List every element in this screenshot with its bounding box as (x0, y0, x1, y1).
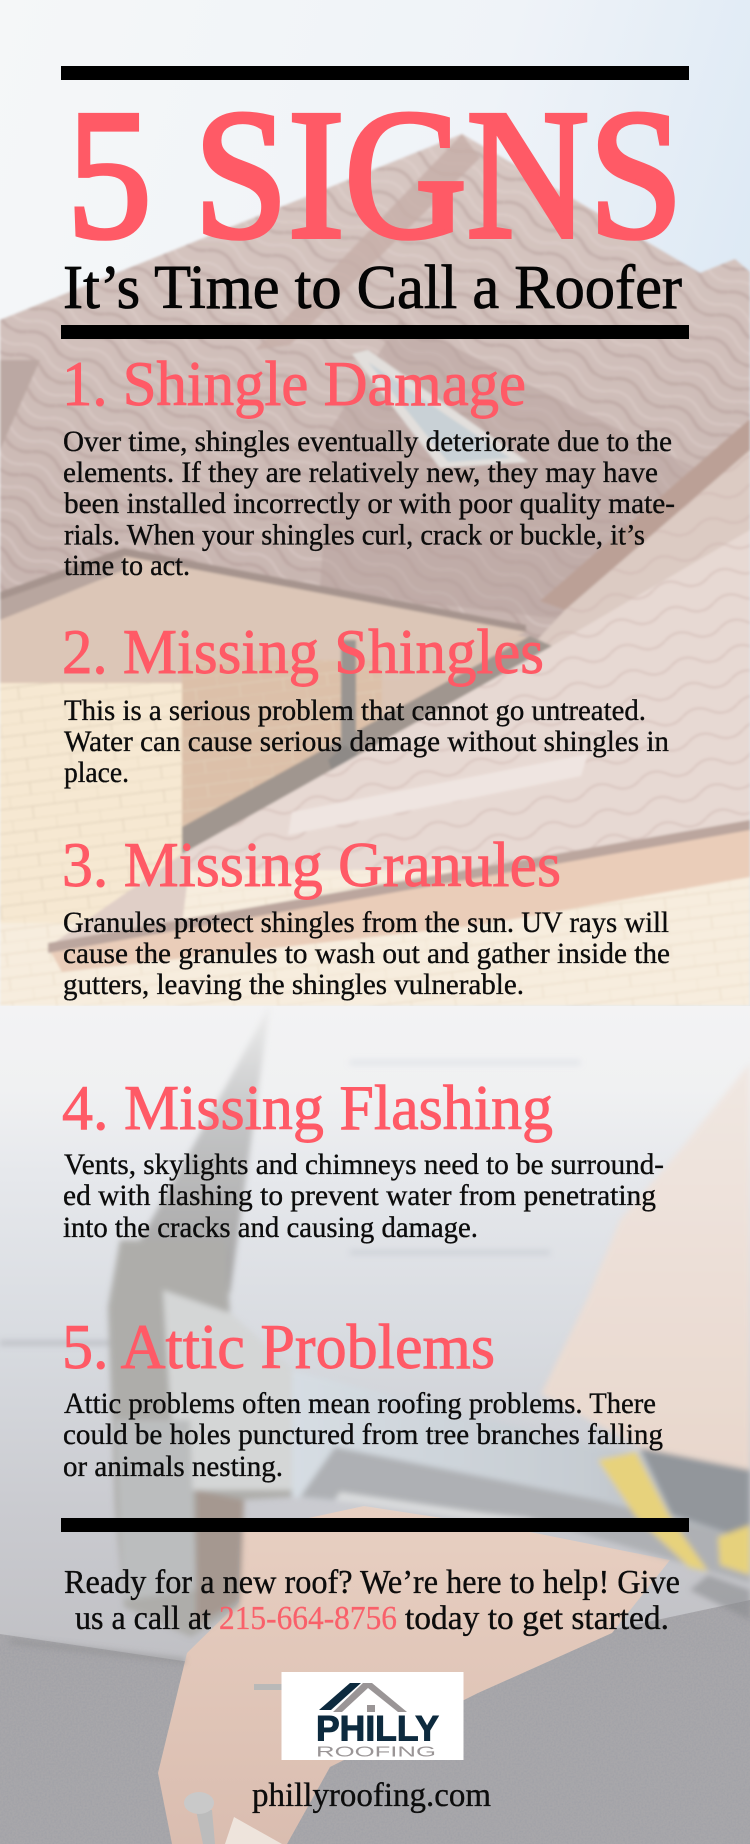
heading 4: 4. Missing Flashing (62, 1072, 553, 1143)
third rule (61, 1518, 689, 1532)
body 5: could be holes punctured from tree branches falling (63, 1418, 663, 1451)
body 5: or animals nesting. (63, 1450, 283, 1483)
body 5: Attic problems often mean roofing problems. There (64, 1387, 656, 1420)
body 4: Vents, skylights and chimneys need to be surround- (64, 1148, 664, 1181)
section 1: Shingle Damage (62, 348, 675, 582)
body 3: cause the granules to wash out and gather inside the (63, 937, 670, 970)
body 1: time to act. (64, 549, 190, 582)
background photo: hammer and hand on shingles (0, 1005, 750, 1844)
heading 1: 1. Shingle Damage (62, 348, 526, 419)
body 3: Granules protect shingles from the sun. UV rays will (63, 906, 669, 939)
heading 3: 3. Missing Granules (62, 829, 561, 900)
section 3: Missing Granules (62, 829, 670, 1001)
body 5 (63, 1387, 663, 1483)
body 3: gutters, leaving the shingles vulnerable. (63, 968, 524, 1001)
body 2: place. (64, 756, 129, 789)
body 1: rials. When your shingles curl, crack or buckle, it’s (64, 518, 645, 552)
call to action: Ready for a new roof? We’re here to help! Give (64, 1564, 680, 1601)
logo: Philly Roofing (282, 1672, 464, 1760)
section 4: Missing Flashing (62, 1072, 664, 1244)
subtitle: It’s Time to Call a Roofer (63, 254, 682, 322)
body 1: Over time, shingles eventually deteriorate due to the (63, 425, 672, 458)
body 4: into the cracks and causing damage. (63, 1211, 478, 1244)
website: phillyroofing.com (252, 1777, 491, 1814)
body 2 (64, 694, 669, 789)
background photo: house roof (0, 0, 750, 1006)
call to action: us a call at (75, 1600, 212, 1637)
body 4: ed with flashing to prevent water from penetrating (63, 1179, 656, 1212)
title: 5 SIGNS: 5 SIGNS (67, 72, 683, 278)
body 1: been installed incorrectly or with poor quality mate- (64, 487, 675, 520)
body 2: This is a serious problem that cannot go untreated. (64, 694, 646, 727)
phone number: 215-664-8756 (219, 1600, 397, 1637)
logo: Philly Roofing: PHILLY (316, 1710, 439, 1748)
call to action: today to get started. (405, 1600, 669, 1637)
body 3 (63, 906, 670, 1001)
logo: Philly Roofing: ROOFING (316, 1744, 436, 1760)
top rule (61, 66, 689, 80)
body 1 (63, 425, 675, 582)
heading 5: 5. Attic Problems (62, 1311, 495, 1382)
second rule (61, 325, 689, 339)
call to action (64, 1564, 680, 1637)
heading 2: 2. Missing Shingles (62, 616, 544, 687)
section 2: Missing Shingles (62, 616, 669, 789)
body 1: elements. If they are relatively new, they may have (63, 456, 658, 489)
body 2: Water can cause serious damage without shingles in (64, 725, 669, 758)
body 4 (63, 1148, 664, 1244)
section 5: Attic Problems (62, 1311, 663, 1483)
